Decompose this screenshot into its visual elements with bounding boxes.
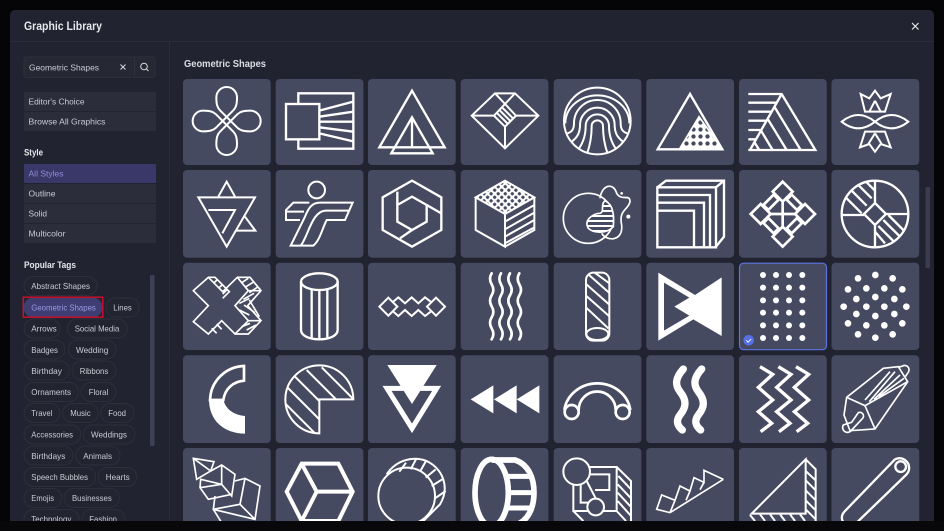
icon: close [912, 23, 918, 30]
tile: triangles seven [183, 170, 271, 258]
tags list: Wedding [76, 346, 109, 355]
tags list: Fashion [89, 515, 117, 524]
menu: style: Solid [28, 208, 47, 218]
menu: style: All Styles [28, 168, 64, 178]
tags list: Animals [83, 452, 112, 461]
bottom screen band [0, 521, 944, 531]
tags list: Speech Bubbles [31, 473, 88, 482]
tile: nested triangles [368, 79, 456, 165]
tile: gem [461, 79, 548, 165]
tile: hatched right triangle [739, 448, 827, 531]
tile: flow diagram [554, 448, 641, 531]
tile: dot grid selected [740, 263, 826, 350]
tile: runner [276, 170, 363, 258]
tile: lotus [832, 79, 919, 165]
header: dialog title: Graphic Library [24, 21, 103, 33]
tags list: Social Media [75, 324, 120, 334]
menu: browse [24, 92, 156, 131]
tile: segmented circle [832, 170, 919, 258]
tile: 3D x [183, 263, 271, 350]
tile: blob and circle [554, 170, 641, 258]
tile: cube [461, 170, 548, 258]
tile: vertical waves [461, 263, 548, 350]
tile: capsule [832, 448, 919, 531]
tags list: Birthday [31, 367, 63, 376]
graphics grid [183, 79, 919, 531]
tile: dotted triangle [646, 79, 734, 165]
tile: striped pie [276, 355, 363, 443]
tags list: Abstract Shapes [31, 282, 90, 291]
tile: motor [832, 355, 919, 443]
tags list: Emojis [31, 494, 54, 503]
tile: cylinder [276, 263, 363, 350]
tags list: Food [108, 409, 126, 418]
tile: triangle pair [368, 355, 456, 443]
tags list: Music [70, 409, 91, 418]
menu: style: Multicolor [28, 228, 66, 238]
tile: hexagon [368, 170, 456, 258]
tile: knot [183, 79, 271, 165]
tile: zigzags [739, 355, 827, 443]
search box: Geometric Shapes [29, 62, 99, 72]
tags list: Floral [89, 388, 108, 397]
tags list: Lines [113, 304, 132, 312]
tile: fingerprint circle [554, 79, 641, 165]
heading: geometric shapes: Geometric Shapes [184, 59, 266, 70]
tile: half solid crescent [183, 355, 271, 443]
tags list: Arrows [31, 324, 57, 334]
tags list: Businesses [72, 494, 112, 503]
tags list: Ribbons [80, 367, 108, 376]
tags list: Ornaments [31, 388, 71, 397]
heading: popular tags: Popular Tags [24, 260, 76, 270]
tags list: Badges [31, 346, 58, 355]
tags list: Geometric Shapes [31, 304, 96, 312]
tags list: Weddings [91, 430, 127, 440]
tile: layered box [646, 170, 734, 258]
tile: thick waves [646, 355, 734, 443]
tile: arch [554, 355, 641, 443]
tags list: Hearts [106, 473, 130, 482]
tile: stairs [646, 448, 734, 531]
sidebar scrollbar [150, 275, 154, 446]
menu: browse: Editor's Choice [28, 96, 85, 106]
tags list [23, 276, 139, 528]
tile: radial dots [832, 263, 919, 350]
menu: browse: Browse All Graphics [28, 116, 106, 126]
heading: style: Style [24, 148, 43, 158]
tile: striped capsule [554, 263, 641, 350]
tile: thick ring [461, 448, 548, 531]
tags list: Technology [31, 515, 72, 524]
tile: striped triangle [739, 79, 827, 165]
tile: zigzag band [368, 263, 456, 350]
tags list: Travel [31, 409, 52, 418]
menu: style [24, 164, 156, 243]
tile: rewind triangles [461, 355, 548, 443]
tile: stacked cubes [183, 448, 271, 531]
panel: sidebar [23, 57, 156, 528]
tags list: Birthdays [31, 452, 65, 461]
tile: hatched disc [368, 448, 456, 531]
search box [24, 57, 155, 78]
tile: thick cube [276, 448, 363, 531]
tile: bowtie [646, 263, 734, 350]
icon: selected check [743, 335, 754, 346]
tile: square rays [276, 79, 363, 165]
menu: style: Outline [28, 188, 56, 198]
main scrollbar [926, 187, 930, 268]
tile: diamond ornament [739, 170, 827, 258]
tags list: Accessories [31, 430, 73, 440]
